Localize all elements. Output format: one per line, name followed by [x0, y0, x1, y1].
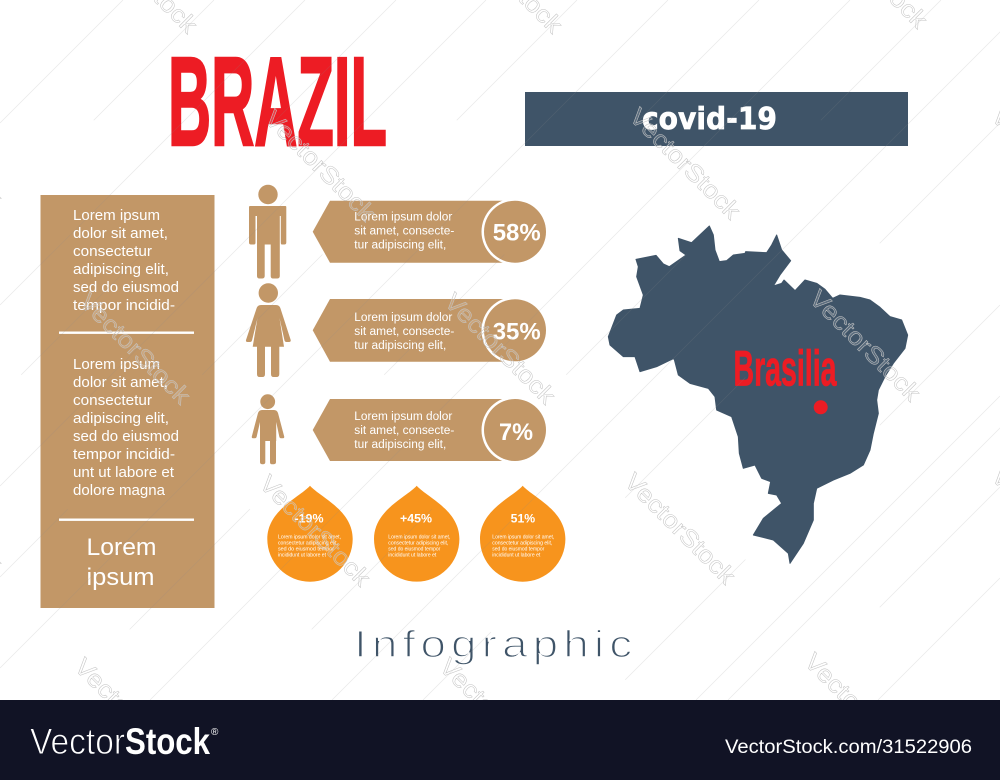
- text: VectorStock: [69, 653, 191, 776]
- text: VectorStock: [624, 103, 746, 226]
- text block: first paragraph: adipiscing elit,: [73, 262, 169, 278]
- text block: second paragraph: sed do eiusmod: [73, 429, 179, 445]
- heading: Infographic: Infographic: [354, 623, 637, 665]
- icon: man: [249, 185, 286, 278]
- text block: second paragraph: Lorem ipsum: [73, 357, 160, 373]
- text block: first paragraph: [73, 208, 179, 314]
- callout: 35%: [313, 297, 548, 364]
- drop: +45%: consectetur adipiscing elit,: [388, 540, 449, 546]
- footer bar: [0, 700, 1000, 780]
- drop: -19%: sed do eiusmod tempor: [278, 546, 334, 552]
- banner: covid-19: covid-19: [642, 102, 777, 137]
- text: VectorStock: [259, 105, 381, 228]
- text block: second paragraph: dolor sit amet,: [73, 375, 168, 391]
- map label: Brasilia: Brasilia: [734, 340, 837, 396]
- map marker: capital dot: [814, 400, 828, 414]
- banner: covid-19: [525, 92, 908, 146]
- drop: 51%: Lorem ipsum dolor sit amet,: [492, 534, 555, 540]
- panel: lorem ipsum text column: [40, 195, 214, 608]
- drop: -19%: consectetur adipiscing elit,: [278, 540, 338, 546]
- callout: 7%: sit amet, consecte-: [354, 425, 454, 437]
- drop: 51%: consectetur adipiscing elit,: [492, 540, 553, 546]
- drop: +45%: +45%: [400, 511, 432, 525]
- text block: first paragraph: tempor incidid-: [73, 298, 175, 314]
- text: BRAZIL: [168, 31, 387, 172]
- callout: 35%: Lorem ipsum dolor: [354, 312, 452, 324]
- icon: child: [252, 394, 284, 464]
- drop: +45%: Lorem ipsum dolor sit amet,: [388, 534, 451, 540]
- drop: 51%: 51%: [511, 511, 536, 525]
- callout: 35%: tur adipiscing elit,: [354, 340, 446, 352]
- callout: 7%: Lorem ipsum dolor: [354, 411, 452, 423]
- drop: +45%: sed do eiusmod tempor: [388, 546, 440, 552]
- footer logo: VectorStock: [30, 721, 219, 762]
- callout: 58%: tur adipiscing elit,: [354, 240, 446, 252]
- drop: 51%: [480, 486, 565, 582]
- text: VectorStock: [74, 288, 196, 411]
- text block: large lorem ipsum: Lorem: [86, 534, 156, 561]
- drop: -19%: [267, 486, 353, 582]
- callout: 7%: 7%: [499, 419, 533, 446]
- text block: second paragraph: tempor incidid-: [73, 447, 175, 463]
- text: VectorStock: [434, 653, 556, 776]
- callout: 7%: [313, 396, 548, 464]
- text block: second paragraph: unt ut labore et: [73, 465, 174, 481]
- footer logo: VectorStock: Stock: [125, 721, 210, 762]
- text: VectorStock: [804, 285, 926, 408]
- text block: large lorem ipsum: ipsum: [86, 564, 154, 591]
- callout: 58%: [313, 198, 548, 265]
- text block: first paragraph: sed do eiusmod: [73, 280, 179, 296]
- icon: woman: [246, 283, 291, 377]
- text block: second paragraph: adipiscing elit,: [73, 411, 169, 427]
- callout: 7%: tur adipiscing elit,: [354, 439, 446, 451]
- text block: first paragraph: Lorem ipsum: [73, 208, 160, 224]
- drop: 51%: incididunt ut labore et: [492, 552, 541, 558]
- drop: 51%: sed do eiusmod tempor: [492, 546, 544, 552]
- callout: 35%: 35%: [493, 318, 541, 346]
- drop: -19%: Lorem ipsum dolor sit amet,: [278, 534, 341, 540]
- callout: 58%: sit amet, consecte-: [354, 226, 454, 238]
- footer logo: VectorStock: ®: [211, 727, 219, 738]
- text block: first paragraph: dolor sit amet,: [73, 226, 168, 242]
- text block: second paragraph: consectetur: [73, 393, 152, 409]
- text: VectorStock: [619, 468, 741, 591]
- text: VectorStock: [254, 470, 376, 593]
- drop: -19%: incididunt ut labore et: [278, 552, 326, 558]
- callout: 35%: sit amet, consecte-: [354, 326, 454, 338]
- text block: second paragraph: [73, 357, 179, 499]
- text block: first paragraph: consectetur: [73, 244, 152, 260]
- text: VectorStock: [799, 648, 921, 771]
- footer logo: VectorStock: Vector: [30, 721, 125, 762]
- text block: large lorem ipsum: [86, 534, 156, 591]
- text block: second paragraph: dolore magna: [73, 483, 166, 499]
- callout: 58%: Lorem ipsum dolor: [354, 212, 452, 224]
- footer id text: VectorStock.com/31522906: [725, 737, 972, 758]
- text: VectorStock: [439, 288, 561, 411]
- map: Brazil: [608, 226, 908, 563]
- callout: 58%: 58%: [493, 220, 541, 247]
- drop: -19%: -19%: [294, 511, 324, 525]
- drop: +45%: [374, 486, 459, 582]
- drop: +45%: incididunt ut labore et: [388, 552, 437, 558]
